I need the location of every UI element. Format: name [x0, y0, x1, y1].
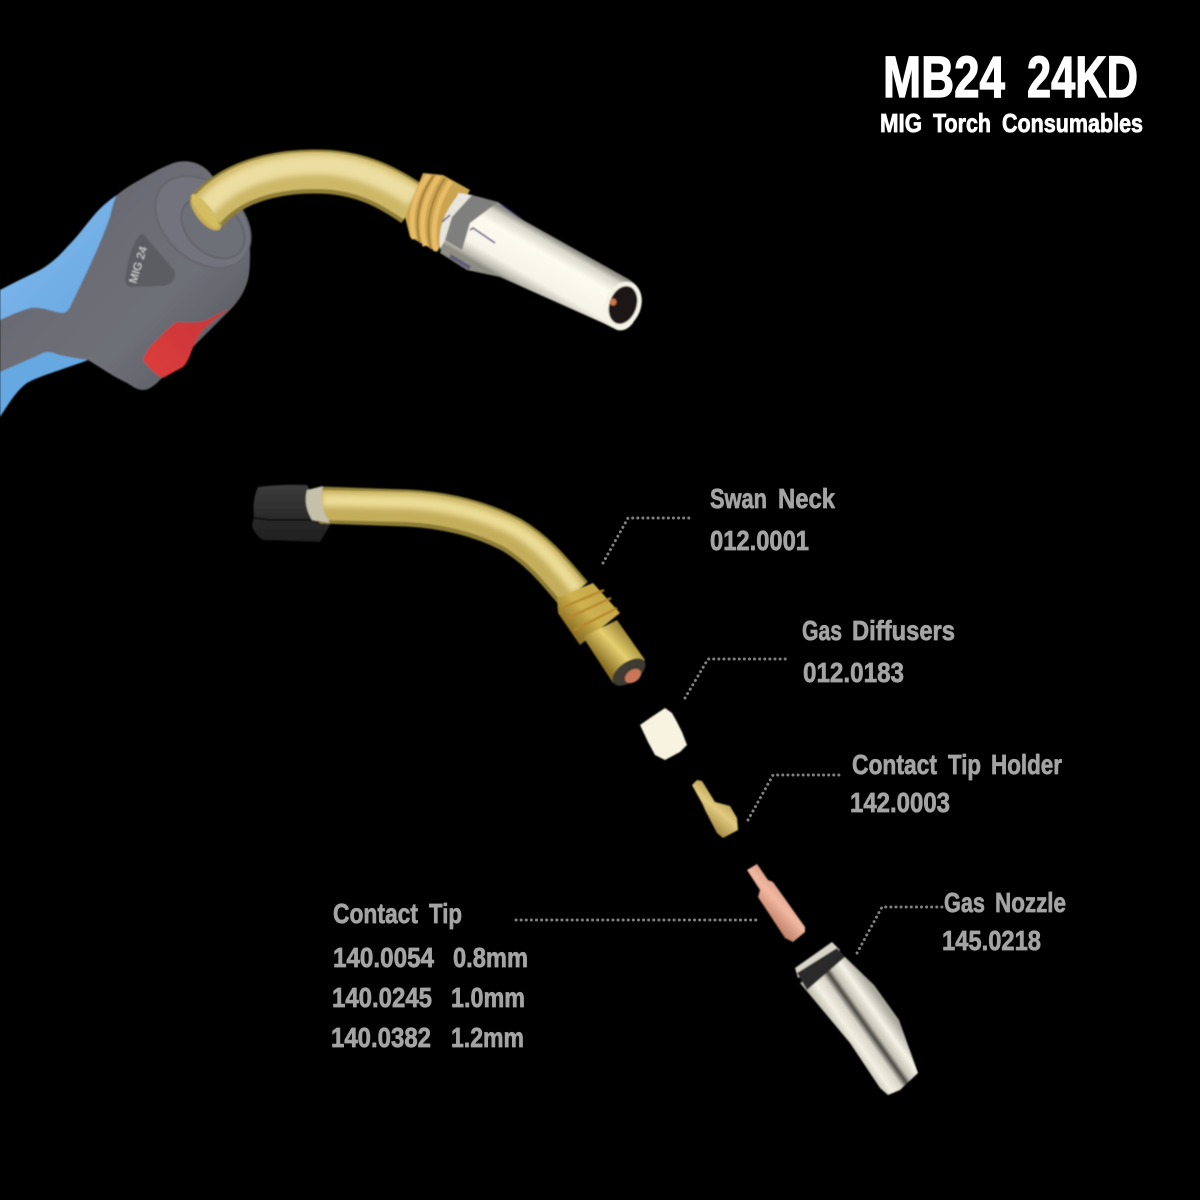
- title block: Consumables: [1002, 108, 1143, 138]
- label: swan neck: Swan: [710, 483, 767, 514]
- label: contact tip sizes: 1.2mm: [451, 1022, 524, 1053]
- leader: gas nozzle: [857, 907, 945, 953]
- part: gas nozzle: [795, 942, 918, 1095]
- title block: Torch: [933, 108, 991, 138]
- leader: gas diffusers: [685, 659, 787, 698]
- label: contact tip holder: Holder: [991, 749, 1062, 780]
- handle: grey body: [0, 158, 269, 390]
- label: contact tip holder: Tip: [948, 749, 981, 780]
- title block: MB24: [883, 45, 1005, 110]
- threaded collar: [405, 173, 470, 252]
- leader: swan neck: [603, 518, 693, 563]
- label: gas diffusers: 012.0183: [803, 657, 904, 688]
- label: contact tip sizes: [331, 898, 528, 1053]
- gas nozzle (assembled): [439, 193, 648, 334]
- handle: red trigger: [143, 308, 230, 378]
- handle: label plate: MIG 24: [127, 245, 150, 285]
- label: contact tip sizes: Contact: [333, 898, 418, 929]
- part: contact tip: [747, 864, 805, 942]
- label: contact tip sizes: 140.0382: [331, 1022, 431, 1053]
- label: contact tip sizes: Tip: [429, 898, 462, 929]
- label: gas diffusers: Diffusers: [852, 615, 955, 646]
- label: contact tip sizes: 140.0054: [333, 942, 435, 973]
- assembled torch illustration: [0, 158, 648, 417]
- label: gas diffusers: Gas: [802, 615, 842, 646]
- swan neck (assembled): [185, 165, 414, 235]
- label: contact tip holder: [850, 749, 1062, 818]
- handle: label plate: [125, 234, 175, 287]
- label: gas nozzle: Nozzle: [995, 887, 1066, 918]
- part: gas diffuser: [640, 708, 687, 760]
- label: contact tip holder: Contact: [852, 749, 937, 780]
- leader: contact tip: [516, 918, 756, 922]
- title block: 24KD: [1027, 45, 1138, 110]
- label: contact tip sizes: 1.0mm: [451, 982, 525, 1013]
- label: contact tip holder: 142.0003: [850, 787, 950, 818]
- label: gas nozzle: [942, 887, 1066, 956]
- label: contact tip sizes: 0.8mm: [453, 942, 528, 973]
- handle: blue grip: [0, 195, 125, 417]
- label: gas diffusers: [802, 615, 955, 688]
- label: gas nozzle: 145.0218: [942, 925, 1041, 956]
- label: swan neck: [710, 483, 836, 556]
- label: swan neck: 012.0001: [710, 525, 809, 556]
- part: contact tip holder: [692, 780, 738, 838]
- part: swan neck: [252, 485, 650, 691]
- title block: [880, 45, 1143, 138]
- label: contact tip sizes: 140.0245: [332, 982, 432, 1013]
- exploded parts illustration: [252, 485, 918, 1095]
- label: swan neck: Neck: [778, 483, 836, 514]
- title block: MIG: [880, 108, 922, 138]
- label: gas nozzle: Gas: [944, 887, 985, 918]
- leader: contact tip holder: [748, 775, 840, 820]
